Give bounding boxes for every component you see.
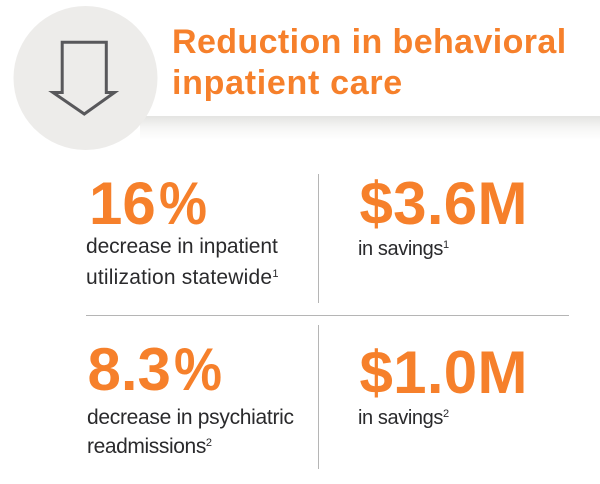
value: % <box>159 170 207 237</box>
value: 16 <box>89 170 156 237</box>
title <box>172 23 567 102</box>
description <box>87 406 294 458</box>
description: in savings2 <box>358 407 449 429</box>
title: inpatient care <box>172 64 403 102</box>
stat: 8.3% decrease in psychiatric readmissions <box>87 336 294 458</box>
value <box>88 336 222 403</box>
vertical divider bottom <box>318 325 319 469</box>
value <box>89 170 207 237</box>
vertical divider top <box>318 174 319 303</box>
horizontal divider <box>86 315 569 316</box>
description <box>86 235 278 289</box>
header shadow band <box>140 116 600 140</box>
stat: $3.6M savings <box>358 170 528 260</box>
value: 8.3 <box>88 336 171 403</box>
stat: $1.0M savings <box>358 339 528 429</box>
value: % <box>174 336 222 403</box>
value: $3.6M <box>360 170 528 237</box>
value: $1.0M <box>360 339 528 406</box>
title: Reduction in behavioral <box>172 23 567 61</box>
description: readmissions2 <box>87 435 212 458</box>
description: in savings1 <box>358 238 449 260</box>
description: decrease in psychiatric <box>87 406 294 429</box>
description: decrease in inpatient <box>86 235 278 258</box>
stat: 16% decrease in inpatient utilization <box>86 170 278 289</box>
description: utilization statewide1 <box>86 266 278 289</box>
icon: grey circle with down arrow <box>14 6 158 150</box>
icon: down arrow <box>53 42 114 114</box>
